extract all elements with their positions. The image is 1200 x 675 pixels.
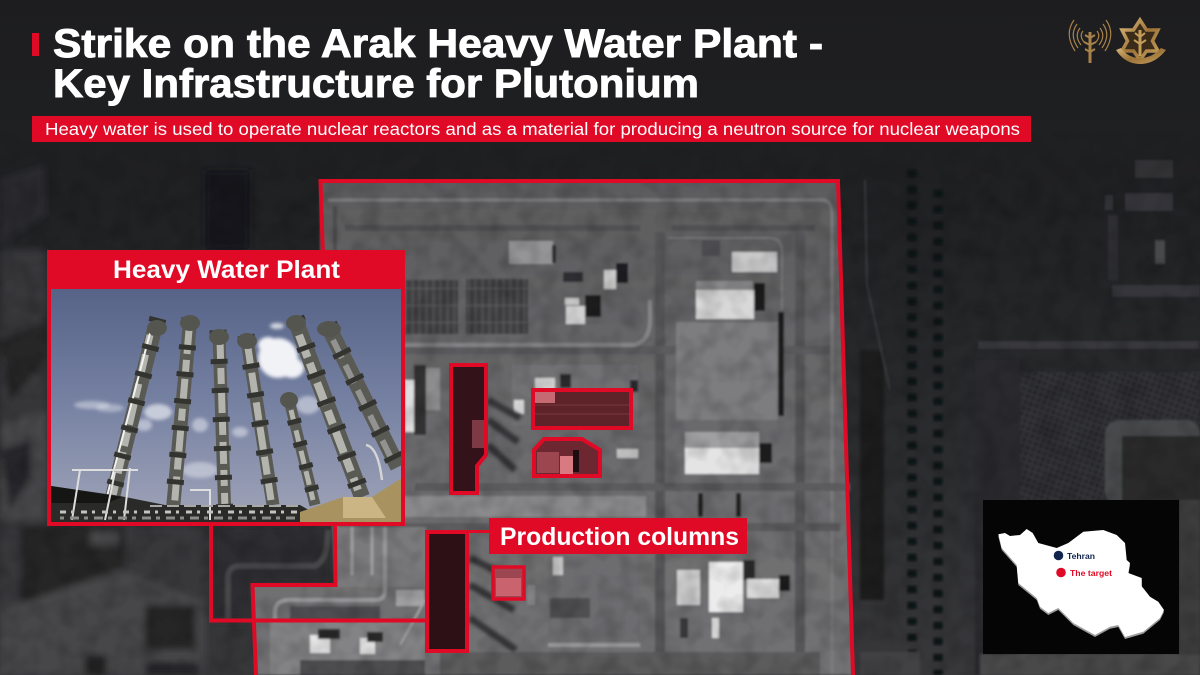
- panel heading: Heavy Water Plant: [113, 256, 341, 284]
- label: production columns: Production columns: [500, 523, 739, 551]
- towers: dark base layer: [108, 322, 398, 520]
- label: production columns: [467, 518, 747, 554]
- marker: the target: The target: [1070, 568, 1112, 578]
- south-west buildings: [310, 635, 330, 653]
- south lot: [548, 555, 640, 643]
- highlighted target: northern building: [533, 390, 631, 428]
- icon: intelligence corps emblem: [1069, 20, 1111, 63]
- east buildings: [685, 432, 759, 448]
- marker: Tehran: Tehran: [1067, 551, 1095, 561]
- tower rings: [106, 318, 398, 520]
- mottled ground texture: [6, 183, 1192, 675]
- panel: heavy water plant photo: [47, 250, 405, 526]
- connector from photo panel to production columns: [211, 525, 427, 620]
- towers: silver highlights: [112, 330, 392, 510]
- tree rows: [912, 170, 938, 675]
- title accent bar: [32, 33, 39, 56]
- tower heads: [147, 315, 341, 408]
- title: [53, 22, 823, 106]
- photo of production towers: [51, 289, 402, 522]
- title: Strike on the Arak Heavy Water Plant -: [53, 22, 823, 66]
- icon: IDF emblem: [1116, 20, 1166, 64]
- buildings north: [509, 241, 553, 264]
- map of Iran: [998, 529, 1164, 639]
- highlighted target: central building: [534, 439, 600, 476]
- marker: Tehran: [1054, 551, 1095, 561]
- lot and strip: [676, 322, 778, 420]
- south-west ground: [336, 527, 426, 587]
- long shadows cast by the columns: [470, 400, 520, 650]
- central: [512, 365, 638, 425]
- highlighted target: upper production columns: [451, 365, 486, 493]
- inset map panel: [983, 500, 1179, 654]
- subtitle banner: Heavy water is used to operate nuclear reactors and as a material for producing a neutron source for nuclear weapons: [45, 119, 1020, 139]
- highlighted target: small building: [493, 567, 524, 599]
- roads: [660, 232, 800, 675]
- title: Key Infrastructure for Plutonium: [53, 62, 699, 106]
- tan concrete blocks: [300, 478, 402, 522]
- site boundary outline: [252, 181, 853, 675]
- satellite view of the site: [252, 181, 853, 675]
- highlighted target: lower production columns: [427, 532, 467, 651]
- ponds: [405, 280, 458, 334]
- plant base: [51, 486, 330, 522]
